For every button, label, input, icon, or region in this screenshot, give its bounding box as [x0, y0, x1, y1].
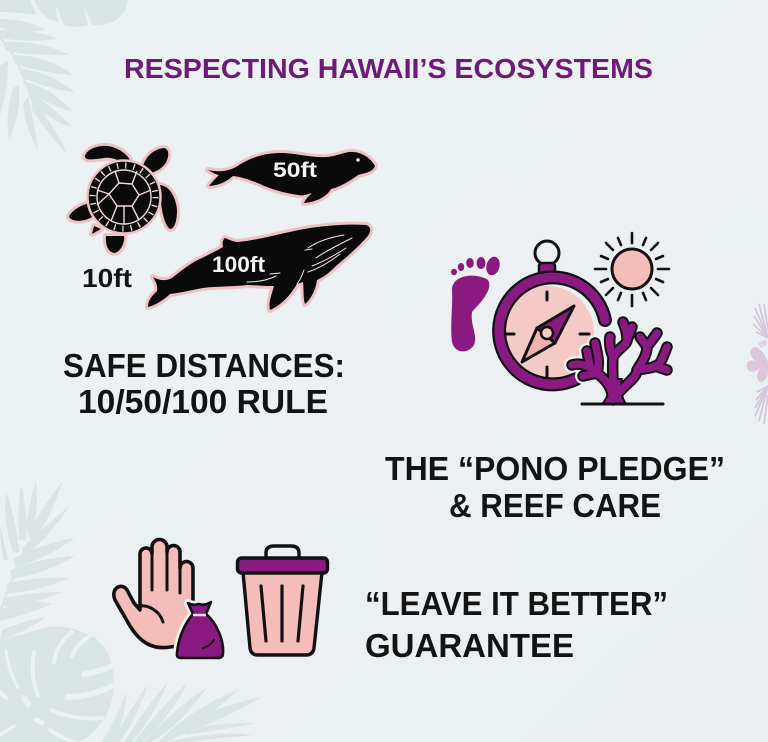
icon: trash bag	[177, 602, 223, 658]
icon: compass	[499, 241, 605, 384]
icon: trash can	[238, 546, 328, 655]
background: top-left monstera leaf	[0, 0, 128, 27]
icon: sea turtle	[69, 146, 177, 253]
background: bottom palm frond	[102, 682, 262, 742]
heading: safe distances: 10/50/100 RULE	[78, 383, 328, 420]
heading: pono pledge	[385, 450, 725, 524]
background: monstera leaf veins	[0, 632, 112, 742]
heading: leave it better	[365, 585, 668, 664]
background: bottom-left monstera leaf	[0, 627, 114, 742]
heading: safe distances	[63, 347, 345, 420]
icon: footprint	[451, 255, 502, 351]
background: top-left palm frond	[0, 19, 75, 155]
heading: safe distances: SAFE DISTANCES:	[63, 347, 345, 384]
icon: monk seal with 50ft: 50ft	[273, 159, 317, 182]
title: RESPECTING HAWAII’S ECOSYSTEMS	[124, 53, 653, 84]
icon: monk seal with 50ft	[208, 152, 375, 203]
icon: humpback whale with 100ft	[148, 225, 370, 310]
label: 10ft: 10ft	[82, 263, 132, 293]
heading: leave it better: GUARANTEE	[365, 627, 574, 664]
heading: pono pledge: & REEF CARE	[449, 487, 661, 524]
icon: raised hand	[114, 540, 193, 648]
icon: humpback whale with 100ft: 100ft	[212, 252, 266, 277]
heading: leave it better: “LEAVE IT BETTER”	[365, 585, 668, 622]
heading: pono pledge: THE “PONO PLEDGE”	[385, 450, 725, 487]
icon: coral	[572, 322, 667, 404]
background: hibiscus flower and palm	[747, 304, 768, 424]
icon: sun	[595, 233, 669, 306]
background: bottom-left palm frond	[0, 480, 75, 640]
